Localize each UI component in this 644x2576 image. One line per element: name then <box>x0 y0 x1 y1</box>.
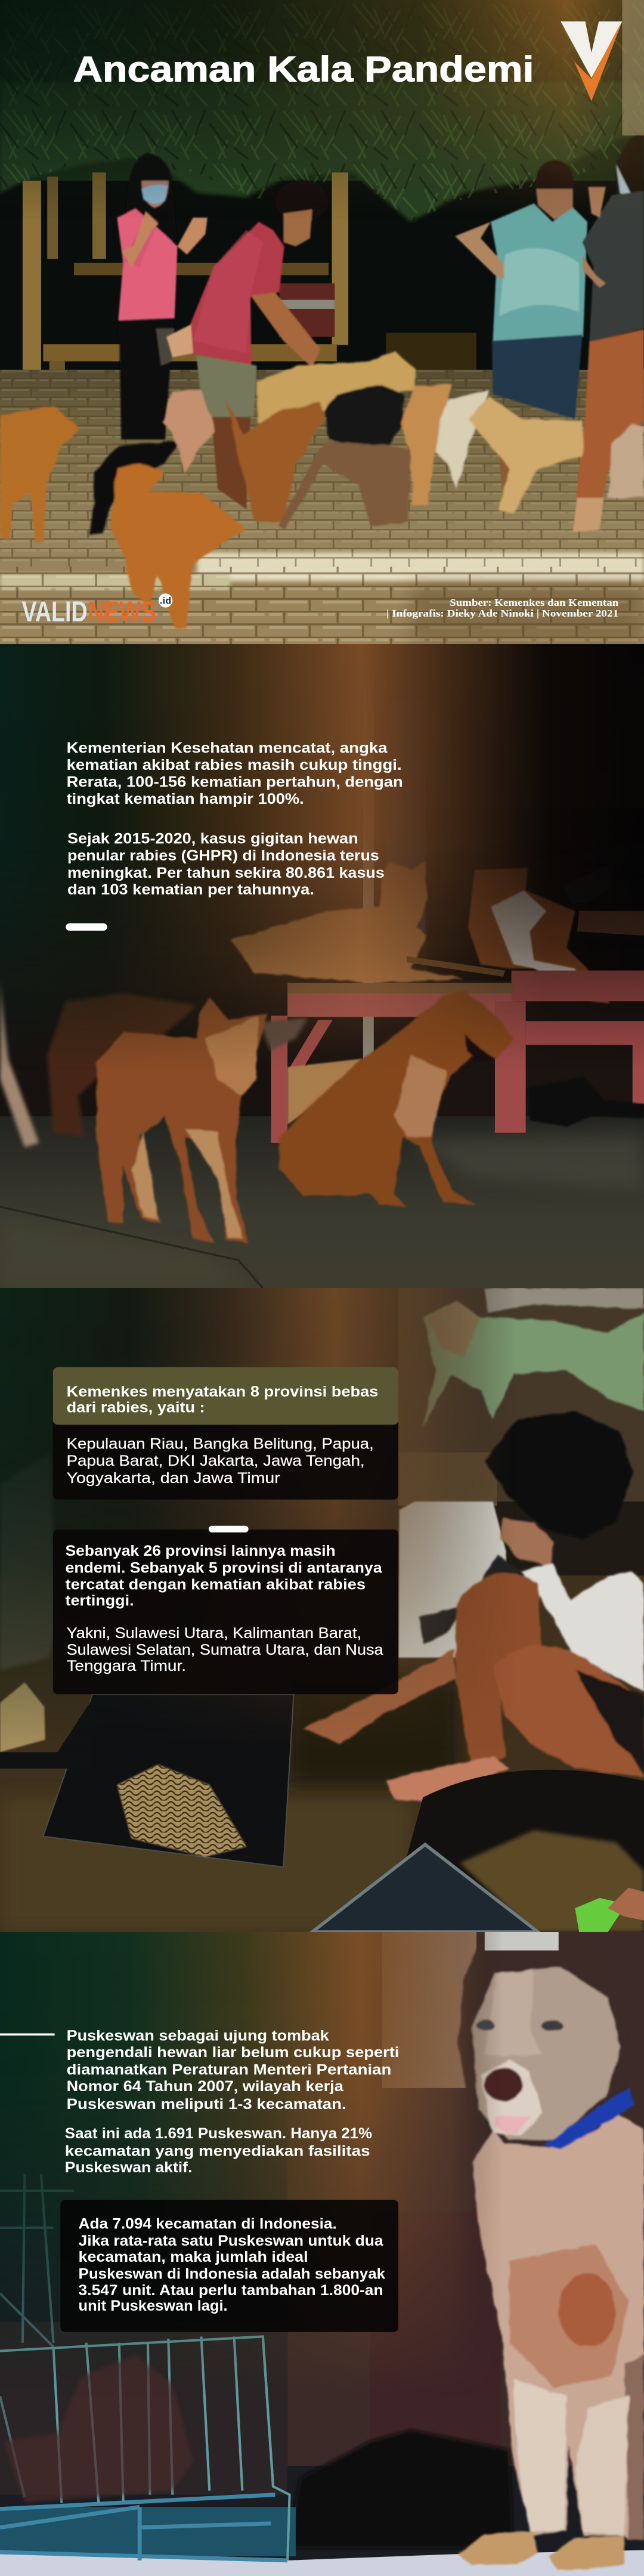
divider line <box>0 2033 55 2036</box>
standing dog <box>97 997 267 1244</box>
brown and white dog on bench <box>468 868 610 1004</box>
card list: Yogyakarta, dan Jawa Timur <box>67 1470 280 1487</box>
dog under bench <box>287 1059 361 1125</box>
faint dogs in the background <box>0 981 308 1147</box>
accent pill <box>209 1526 249 1532</box>
dim background figure <box>0 1453 57 1670</box>
pillar at top right <box>623 0 644 135</box>
card header text <box>67 1384 378 1416</box>
red bench <box>271 971 644 1143</box>
card text: 3.547 unit. Atau perlu tambahan 1.800-an <box>79 2283 383 2299</box>
dirt ground <box>0 1288 644 1932</box>
wooden slats at right <box>577 911 644 936</box>
blanket <box>0 2550 644 2576</box>
title: Ancaman Kala Pandemi <box>73 48 534 89</box>
endemic text: endemi. Sebanyak 5 provinsi di antaranya <box>66 1560 382 1576</box>
shed posts and benches <box>23 172 476 370</box>
text: Puskeswan regulation: diamanatkan Peraturan Menteri Pertanian <box>67 2062 391 2078</box>
card header text: Kemenkes menyatakan 8 provinsi bebas <box>67 1384 378 1400</box>
green dog <box>423 1288 644 1428</box>
strip above husky <box>485 1932 559 1950</box>
panel: hero photo and title <box>0 0 644 644</box>
card text <box>79 2216 385 2314</box>
card list: Kepulauan Riau, Bangka Belitung, Papua, <box>67 1436 374 1452</box>
text: rabies death rate: tingkat kematian hampir 100%. <box>67 791 304 807</box>
grey tray corner <box>312 1844 538 1932</box>
text: rabies death rate: kematian akibat rabies masih cukup tinggi. <box>67 757 402 773</box>
wire cage <box>0 2174 290 2560</box>
wall background <box>0 644 644 1137</box>
icon: V logo <box>561 21 623 101</box>
husky collar <box>544 2088 634 2150</box>
husky body <box>472 2113 644 2540</box>
card background <box>60 2200 398 2332</box>
dark shed background <box>0 181 644 370</box>
woman in pink shirt <box>117 153 208 439</box>
photo: husky and caged dogs <box>0 1932 644 2576</box>
text: bite cases: dan 103 kematian per tahunnya. <box>67 882 314 898</box>
brick ground <box>0 370 644 644</box>
woman in teal shirt <box>455 160 587 501</box>
text: Puskeswan regulation <box>67 2028 399 2113</box>
card header text: dari rabies, yaitu : <box>67 1400 205 1416</box>
text: Puskeswan regulation: Nomor 64 Tahun 2007, wilayah kerja <box>67 2079 343 2095</box>
overlay: top gradient <box>0 0 644 211</box>
panel: rabies-free and endemic provinces <box>0 1288 644 1932</box>
logo: Validnews.id: VALID <box>22 596 88 628</box>
dark dog in shadow <box>287 2430 513 2548</box>
text: Puskeswan count: Saat ini ada 1.691 Puskeswan. Hanya 21% <box>65 2126 372 2142</box>
card list: Papua Barat, DKI Jakarta, Jawa Tengah, <box>67 1453 365 1469</box>
card text: Ada 7.094 kecamatan di Indonesia. <box>79 2216 337 2232</box>
card body <box>53 1419 398 1500</box>
text: bite cases: penular rabies (GHPR) di Indonesia terus <box>67 848 379 864</box>
card list <box>67 1436 374 1487</box>
province list: Yakni, Sulawesi Utara, Kalimantan Barat, <box>67 1626 361 1642</box>
woman in dark shirt and orange trousers <box>573 134 644 532</box>
backdrop <box>0 1932 644 2576</box>
card text: kecamatan, maka jumlah ideal <box>79 2249 308 2265</box>
text: bite cases <box>67 831 385 898</box>
text: Puskeswan count: kecamatan yang menyediakan fasilitas <box>65 2143 370 2159</box>
card text: unit Puskeswan lagi. <box>79 2298 228 2314</box>
green scoop and hand <box>575 1888 644 1932</box>
text: Puskeswan regulation: Puskeswan sebagai ujung tombak <box>67 2028 329 2044</box>
card text: Puskeswan di Indonesia adalah sebanyak <box>79 2266 385 2282</box>
caged puppies <box>4 2355 193 2503</box>
overlay: gradient behind text <box>0 644 644 1096</box>
photo: people feeding stray dogs in a yard <box>0 0 644 644</box>
text: Puskeswan count <box>65 2126 372 2176</box>
logo: Validnews.id <box>21 593 173 621</box>
text: Puskeswan regulation: Puskeswan meliputi 1-3 kecamatan. <box>67 2097 346 2113</box>
logo: Validnews.id: .id <box>160 596 171 606</box>
card: endemic provinces <box>53 1526 398 1694</box>
sitting dog <box>279 991 513 1207</box>
text: rabies death rate <box>67 741 403 807</box>
panel: Puskeswan facilities <box>0 1932 644 2576</box>
black basin <box>386 1770 644 1932</box>
source credit <box>386 597 619 619</box>
foliage: bamboo leaves <box>0 0 644 226</box>
province list: Sulawesi Selatan, Sumatra Utara, dan Nusa <box>67 1642 383 1658</box>
source credit: | Infografis: Dieky Ade Ninoki | November 2021 <box>386 608 618 619</box>
card: Puskeswan shortfall <box>60 2200 398 2332</box>
feeding trays with noodles <box>0 1682 293 1867</box>
boy <box>304 1411 644 1801</box>
overlay: gradient behind text <box>0 1932 644 2445</box>
text: bite cases: Sejak 2015-2020, kasus gigitan hewan <box>67 831 358 847</box>
logo: Validnews.id: NEWS <box>88 596 156 628</box>
text: rabies death rate: Kementerian Kesehatan mencatat, angka <box>67 741 388 757</box>
overlay: gradient behind text <box>0 1288 644 1932</box>
province list <box>67 1626 383 1674</box>
card body <box>53 1530 398 1694</box>
metal pole <box>363 644 374 1061</box>
text: bite cases: meningkat. Per tahun sekira 80.861 kasus <box>67 865 385 881</box>
accent pill <box>66 923 107 931</box>
panel: rabies deaths and bite cases <box>0 644 644 1288</box>
endemic text: tertinggi. <box>66 1593 134 1609</box>
endemic text: tercatat dengan kematian akibat rabies <box>66 1577 366 1593</box>
photo: boy feeding dogs with noodles <box>0 1288 644 1932</box>
province list: Tenggara Timur. <box>67 1658 186 1674</box>
lying tan dog <box>230 862 464 983</box>
concrete floor <box>0 1116 644 1288</box>
husky head <box>458 1936 628 2148</box>
sleeping black dog <box>528 1078 644 1126</box>
card text: Jika rata-rata satu Puskeswan untuk dua <box>79 2233 383 2249</box>
text: Puskeswan regulation: pengendali hewan liar belum cukup seperti <box>67 2045 399 2061</box>
endemic text <box>66 1543 382 1609</box>
card: rabies-free provinces <box>53 1367 398 1500</box>
text: Puskeswan count: Puskeswan aktif. <box>65 2160 192 2176</box>
card header <box>53 1367 398 1425</box>
man in red shirt <box>166 180 328 509</box>
husky <box>458 1936 644 2569</box>
wall behind boy <box>398 1288 644 1501</box>
dog pack <box>0 351 644 628</box>
photo: dogs around a red bench <box>0 644 644 1288</box>
endemic text: Sebanyak 26 provinsi lainnya masih <box>66 1543 336 1559</box>
white jerry can <box>398 1501 506 1658</box>
text: rabies death rate: Rerata, 100-156 kematian pertahun, dengan <box>67 775 403 791</box>
dark dog top right <box>563 862 614 903</box>
source credit: Sumber: Kemenkes dan Kementan <box>450 597 619 608</box>
